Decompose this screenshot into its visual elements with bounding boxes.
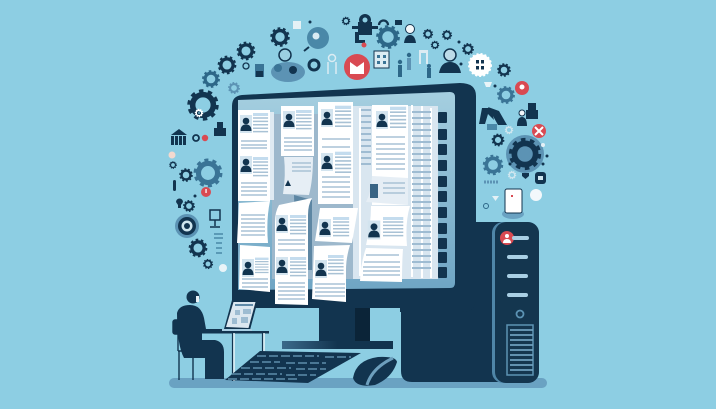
icon: keyhole figure [352,14,378,35]
resume: curled middle [237,201,270,243]
icon cloud: right arc [479,81,548,219]
icon: target [175,214,199,238]
resume: top [238,110,270,201]
screen [238,92,455,290]
icon: gears [219,18,510,93]
icon: alert [201,187,211,197]
icon: red badge [344,54,370,80]
power badge [500,231,514,245]
icon: small red dot [362,42,366,48]
resume: top [281,106,314,156]
icon: small figures [173,180,196,208]
icon: plug [214,122,226,136]
icon: small dots [308,20,496,88]
icon: large gear [506,135,544,173]
icon: person [404,24,416,43]
resume: bottom [360,248,403,282]
icon: floor plan [374,51,389,68]
resume column 4 [360,105,410,282]
chair [173,320,213,380]
laptop [222,300,258,331]
resume: middle [366,206,410,246]
stacked file tabs [438,112,447,278]
icon: standing people [398,50,431,78]
monitor [232,83,476,312]
icon cloud: top arc [219,14,510,93]
resume column 1 [237,110,274,292]
icon: small shapes [484,143,548,208]
icon: dark tablet [535,172,546,184]
body [177,305,224,379]
drive slots [507,236,529,297]
icon: device document [502,189,524,219]
power button [516,310,524,318]
icon: white starburst bottom [219,264,227,272]
icon: headset [379,21,388,25]
icon: stacked list [214,234,223,253]
icon cloud: left arc [168,72,227,272]
computer tower [401,222,539,383]
icon: gears [485,88,516,178]
resume: top [372,105,408,205]
resume: bottom [312,245,350,302]
icon: white starburst [469,54,491,76]
back stack of pages [272,105,438,279]
resume column 2 [275,106,314,305]
icon: award ribbon [328,54,336,74]
resume: fold [283,157,313,195]
icon: gear outlines [170,72,220,268]
keyboard [225,351,361,383]
icon: bank building [171,129,187,145]
icon: white circle [530,189,542,201]
vent [507,325,533,375]
icon: white doc [293,21,301,29]
resume: middle [315,208,358,243]
monitor stand [282,305,393,349]
icon: avatar with helmet [439,49,461,73]
resume column 3 [312,102,358,302]
icon: magnifier globe [304,27,329,51]
resume: long [275,198,312,305]
icon: figures [479,82,538,130]
icon: peach badge [168,152,176,158]
ground shadow [169,378,547,388]
desk [202,331,269,381]
person at laptop desk [173,290,269,381]
icon: terminal [210,210,220,227]
head [186,290,200,304]
resume: bottom [239,245,270,292]
icon: dark badge and red dot [193,135,208,141]
icon: red badges [515,81,546,138]
mouse [353,357,397,386]
icon: large gear [190,92,216,118]
resume: top [318,102,353,204]
resume: fold [366,176,408,205]
icon: c ring and document [243,60,319,77]
icon: group of people [271,49,305,82]
